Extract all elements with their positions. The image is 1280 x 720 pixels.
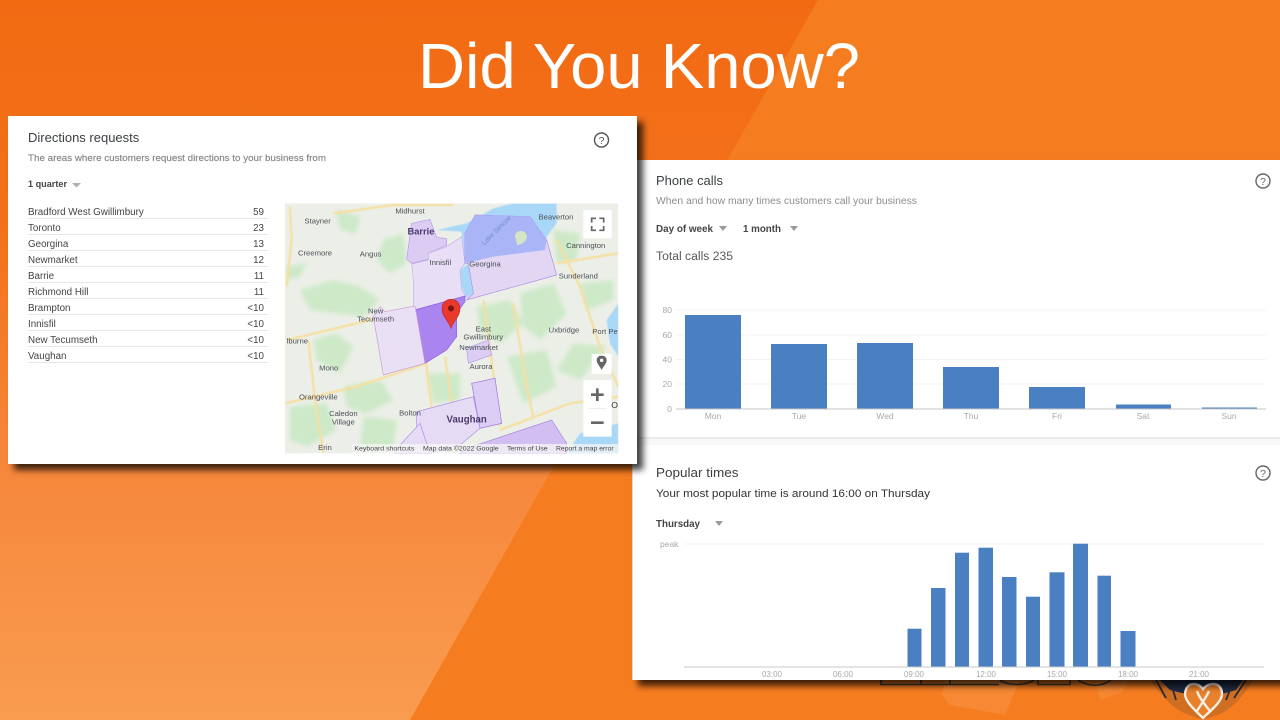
map labels: Uxbridge bbox=[549, 326, 579, 335]
table: direction request areas: New Tecumseth bbox=[28, 335, 98, 346]
table: direction request areas: 13 bbox=[253, 239, 265, 250]
bar chart: calls by day of week: 0 bbox=[667, 404, 672, 414]
table: direction request areas: 23 bbox=[253, 223, 265, 234]
icon: help bbox=[1256, 466, 1270, 480]
map labels: New bbox=[368, 306, 384, 315]
icon: help: ? bbox=[1260, 468, 1266, 480]
icon: emblem bbox=[1150, 680, 1253, 720]
icon: help bbox=[1256, 174, 1270, 188]
dropdown: 1 quarter: 1 quarter bbox=[28, 179, 67, 190]
map labels: Orangeville bbox=[299, 392, 338, 401]
table: direction request areas: <10 bbox=[247, 335, 265, 346]
map labels: Mono bbox=[319, 363, 338, 372]
table: direction request areas: Innisfil bbox=[28, 319, 56, 330]
table: direction request areas: Vaughan bbox=[28, 351, 66, 362]
dropdown: thursday bbox=[656, 519, 723, 530]
bar chart: popular times by hour: 15:00 bbox=[1047, 670, 1068, 679]
map labels: Cannington bbox=[566, 241, 605, 250]
map labels: East bbox=[476, 324, 492, 333]
panel: directions requests bbox=[8, 116, 637, 464]
bar chart: calls by day of week: Tue bbox=[792, 411, 806, 421]
map labels: Tecumseth bbox=[357, 315, 394, 324]
directions areas bbox=[373, 215, 567, 453]
map labels: Angus bbox=[360, 250, 382, 259]
table: direction request areas: 12 bbox=[253, 255, 264, 266]
panel: popular times bbox=[656, 465, 1270, 679]
bar chart: popular times by hour: 06:00 bbox=[833, 670, 854, 679]
title: Did You Know? bbox=[418, 30, 860, 102]
map terrain bbox=[285, 203, 618, 453]
bar chart: popular times by hour: peak bbox=[660, 539, 679, 549]
table: direction request areas: Newmarket bbox=[28, 255, 78, 266]
icon: help: ? bbox=[1260, 176, 1266, 188]
panel: phone calls and popular times bbox=[8, 116, 1280, 680]
map labels: Newmarket bbox=[459, 343, 499, 352]
map labels: Creemore bbox=[298, 248, 332, 257]
map labels: Gwillimbury bbox=[464, 333, 503, 342]
map controls: O bbox=[611, 400, 618, 410]
map attribution: Map data ©2022 Google bbox=[423, 445, 499, 453]
description: When and how many times customers call your business bbox=[656, 196, 917, 207]
total calls: Total calls 235 bbox=[656, 251, 733, 263]
panel: phone calls bbox=[656, 174, 1270, 421]
map labels: Lake Simcoe bbox=[481, 214, 513, 247]
table: direction request areas: Richmond Hill bbox=[28, 287, 88, 298]
map labels: Bolton bbox=[399, 409, 421, 418]
table: direction request areas: <10 bbox=[247, 319, 265, 330]
map labels: Sunderland bbox=[559, 271, 598, 280]
bar chart: calls by day of week: Sat bbox=[1137, 411, 1150, 421]
heading: Popular times bbox=[656, 465, 739, 480]
map controls bbox=[583, 210, 618, 437]
heading: Phone calls bbox=[656, 174, 723, 188]
table: direction request areas: Brampton bbox=[28, 303, 70, 314]
table: direction request areas: <10 bbox=[247, 351, 265, 362]
map labels: Vaughan bbox=[447, 414, 487, 425]
bar chart: calls by day of week: 20 bbox=[663, 379, 672, 389]
faint background shapes bbox=[942, 680, 1130, 715]
icon: help bbox=[594, 133, 608, 147]
dark lettering remnants bbox=[881, 680, 1111, 685]
map labels bbox=[287, 206, 618, 452]
bar chart: popular times by hour bbox=[660, 539, 1264, 679]
bar chart: popular times by hour: 12:00 bbox=[976, 670, 997, 679]
bar chart: popular times by hour: 18:00 bbox=[1118, 670, 1139, 679]
map labels: Caledon bbox=[329, 409, 358, 418]
bar chart: calls by day of week: 80 bbox=[663, 305, 672, 315]
summary: Your most popular time is around 16:00 on Thursday bbox=[656, 488, 931, 500]
dropdown: 1 month: 1 month bbox=[743, 223, 781, 235]
icon: help: ? bbox=[599, 135, 605, 147]
map labels: Georgina bbox=[469, 260, 501, 269]
dropdown: day of week: Day of week bbox=[656, 223, 713, 235]
table: direction request areas: Barrie bbox=[28, 271, 55, 282]
dropdown: thursday: Thursday bbox=[656, 519, 700, 530]
table: direction request areas: 11 bbox=[254, 287, 264, 298]
map labels: Beaverton bbox=[539, 212, 573, 221]
map attribution bbox=[352, 444, 618, 453]
bar chart: calls by day of week: Mon bbox=[705, 411, 722, 421]
map labels: Port Pe bbox=[592, 327, 618, 336]
map bbox=[285, 203, 618, 453]
bar chart: popular times by hour: 09:00 bbox=[904, 670, 925, 679]
heading: Directions requests bbox=[28, 130, 140, 145]
table: direction request areas: Georgina bbox=[28, 239, 69, 250]
map labels: Aurora bbox=[470, 362, 493, 371]
map attribution: Keyboard shortcuts bbox=[354, 446, 415, 453]
table: direction request areas bbox=[28, 207, 268, 362]
map labels: Stayner bbox=[304, 216, 331, 225]
description: The areas where customers request directions to your business from bbox=[28, 153, 326, 164]
map attribution: Terms of Use bbox=[507, 446, 548, 453]
map labels: Midhurst bbox=[395, 206, 426, 215]
icon: map marker bbox=[442, 299, 460, 328]
table: direction request areas: 59 bbox=[253, 207, 264, 218]
bar chart: calls by day of week: Sun bbox=[1221, 411, 1237, 421]
map labels: lburne bbox=[287, 336, 308, 345]
bar chart: calls by day of week: 60 bbox=[663, 330, 672, 340]
bar chart: calls by day of week bbox=[663, 305, 1266, 421]
bar chart: calls by day of week: Thu bbox=[964, 411, 979, 421]
bar chart: popular times by hour: 03:00 bbox=[762, 670, 783, 679]
map labels: Innisfil bbox=[429, 258, 451, 267]
table: direction request areas: Bradford West Gwillimbury bbox=[28, 207, 144, 218]
table: direction request areas: 11 bbox=[254, 271, 264, 282]
map labels: Erin bbox=[318, 443, 332, 452]
logo peeking below the card bbox=[881, 680, 1253, 720]
bar chart: popular times by hour: 21:00 bbox=[1189, 670, 1210, 679]
table: direction request areas: <10 bbox=[247, 303, 265, 314]
map labels: Barrie bbox=[408, 226, 434, 236]
map attribution: Report a map error bbox=[556, 446, 615, 453]
table: direction request areas: Toronto bbox=[28, 223, 61, 234]
map labels: Village bbox=[332, 418, 355, 427]
bar chart: calls by day of week: Fri bbox=[1052, 411, 1062, 421]
bar chart: calls by day of week: 40 bbox=[663, 354, 672, 364]
bar chart: calls by day of week: Wed bbox=[876, 411, 894, 421]
